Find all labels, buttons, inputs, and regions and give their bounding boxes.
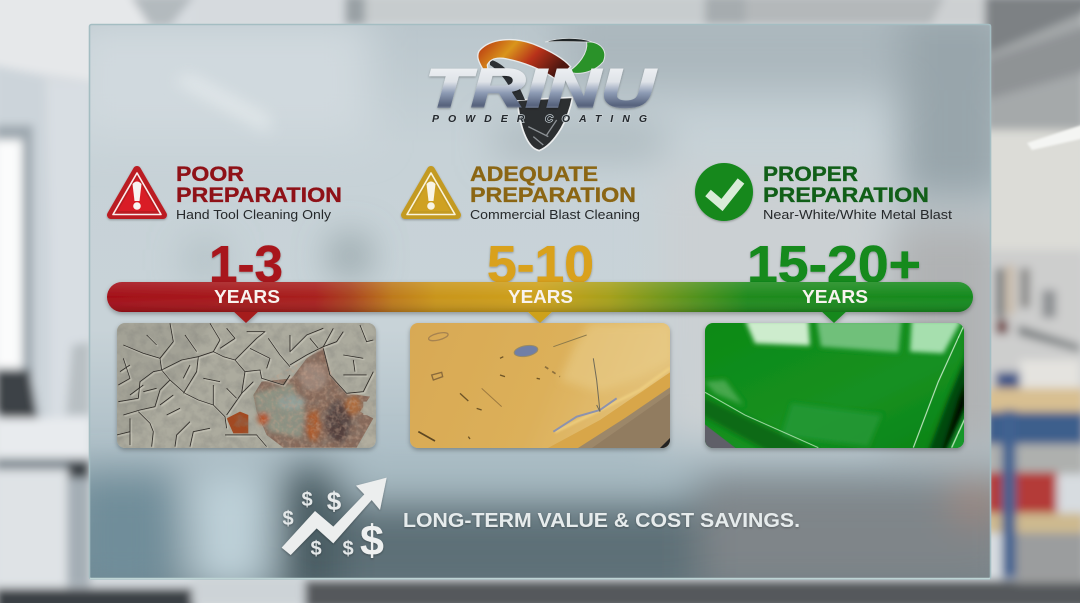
column 1 heading: poor preparation: PREPARATION <box>176 183 342 207</box>
column 2 heading: adequate preparation: PREPARATION <box>470 183 636 207</box>
logo tagline: POWDER COATING <box>432 113 647 125</box>
subtitle: Hand Tool Cleaning Only <box>176 208 332 222</box>
column 1 heading: poor preparation <box>111 162 342 222</box>
photo: scuffed yellow coating <box>410 323 672 448</box>
icon: rising arrow with dollar signs: $ <box>310 538 322 560</box>
column 2 heading: adequate preparation <box>405 162 640 222</box>
logo swoosh: green <box>568 42 605 73</box>
logo: TriNu Powder Coating <box>425 38 657 151</box>
logo swoosh: dark <box>517 97 573 151</box>
icon: rising arrow with dollar signs: $ <box>301 489 313 511</box>
icon: rising arrow with dollar signs: $ <box>327 486 342 516</box>
logo wordmark: TRINU <box>425 57 657 119</box>
logo swoosh: red <box>478 40 571 80</box>
photo: cracked peeling paint and rust <box>117 323 376 448</box>
title: ADEQUATE <box>470 162 598 186</box>
number: 15-20+: 15-20+ <box>747 236 921 294</box>
label: years 2: YEARS <box>508 287 573 307</box>
icon: green check circle <box>695 163 753 221</box>
icon: rising arrow with dollar signs: $ <box>282 508 294 530</box>
label: years 3: YEARS <box>802 287 868 307</box>
photo: glossy green coating <box>702 320 967 452</box>
icon: red warning triangle <box>111 170 163 215</box>
icon: rising arrow with dollar signs: $ <box>360 517 384 565</box>
title: PROPER <box>763 162 858 186</box>
column 3 heading: proper preparation: PREPARATION <box>763 183 929 207</box>
label: years 1: YEARS <box>214 287 280 307</box>
number: 1-3: 1-3 <box>209 236 283 294</box>
icon: yellow warning triangle <box>405 170 457 215</box>
reflection streak <box>184 78 268 129</box>
ceiling light <box>1027 124 1080 150</box>
title: POOR <box>176 162 244 186</box>
column 3 heading: proper preparation <box>695 162 953 222</box>
panel: frosted glass <box>88 24 992 580</box>
subtitle: Near-White/White Metal Blast <box>763 208 953 222</box>
icon: rising arrow with dollar signs: $ <box>342 538 354 560</box>
subtitle: Commercial Blast Cleaning <box>470 208 640 222</box>
icon: rising arrow with dollar signs <box>282 478 387 565</box>
tagline: LONG-TERM VALUE & COST SAVINGS. <box>403 509 800 532</box>
timeline bar with pointers <box>107 282 973 323</box>
number: 5-10: 5-10 <box>487 236 594 294</box>
